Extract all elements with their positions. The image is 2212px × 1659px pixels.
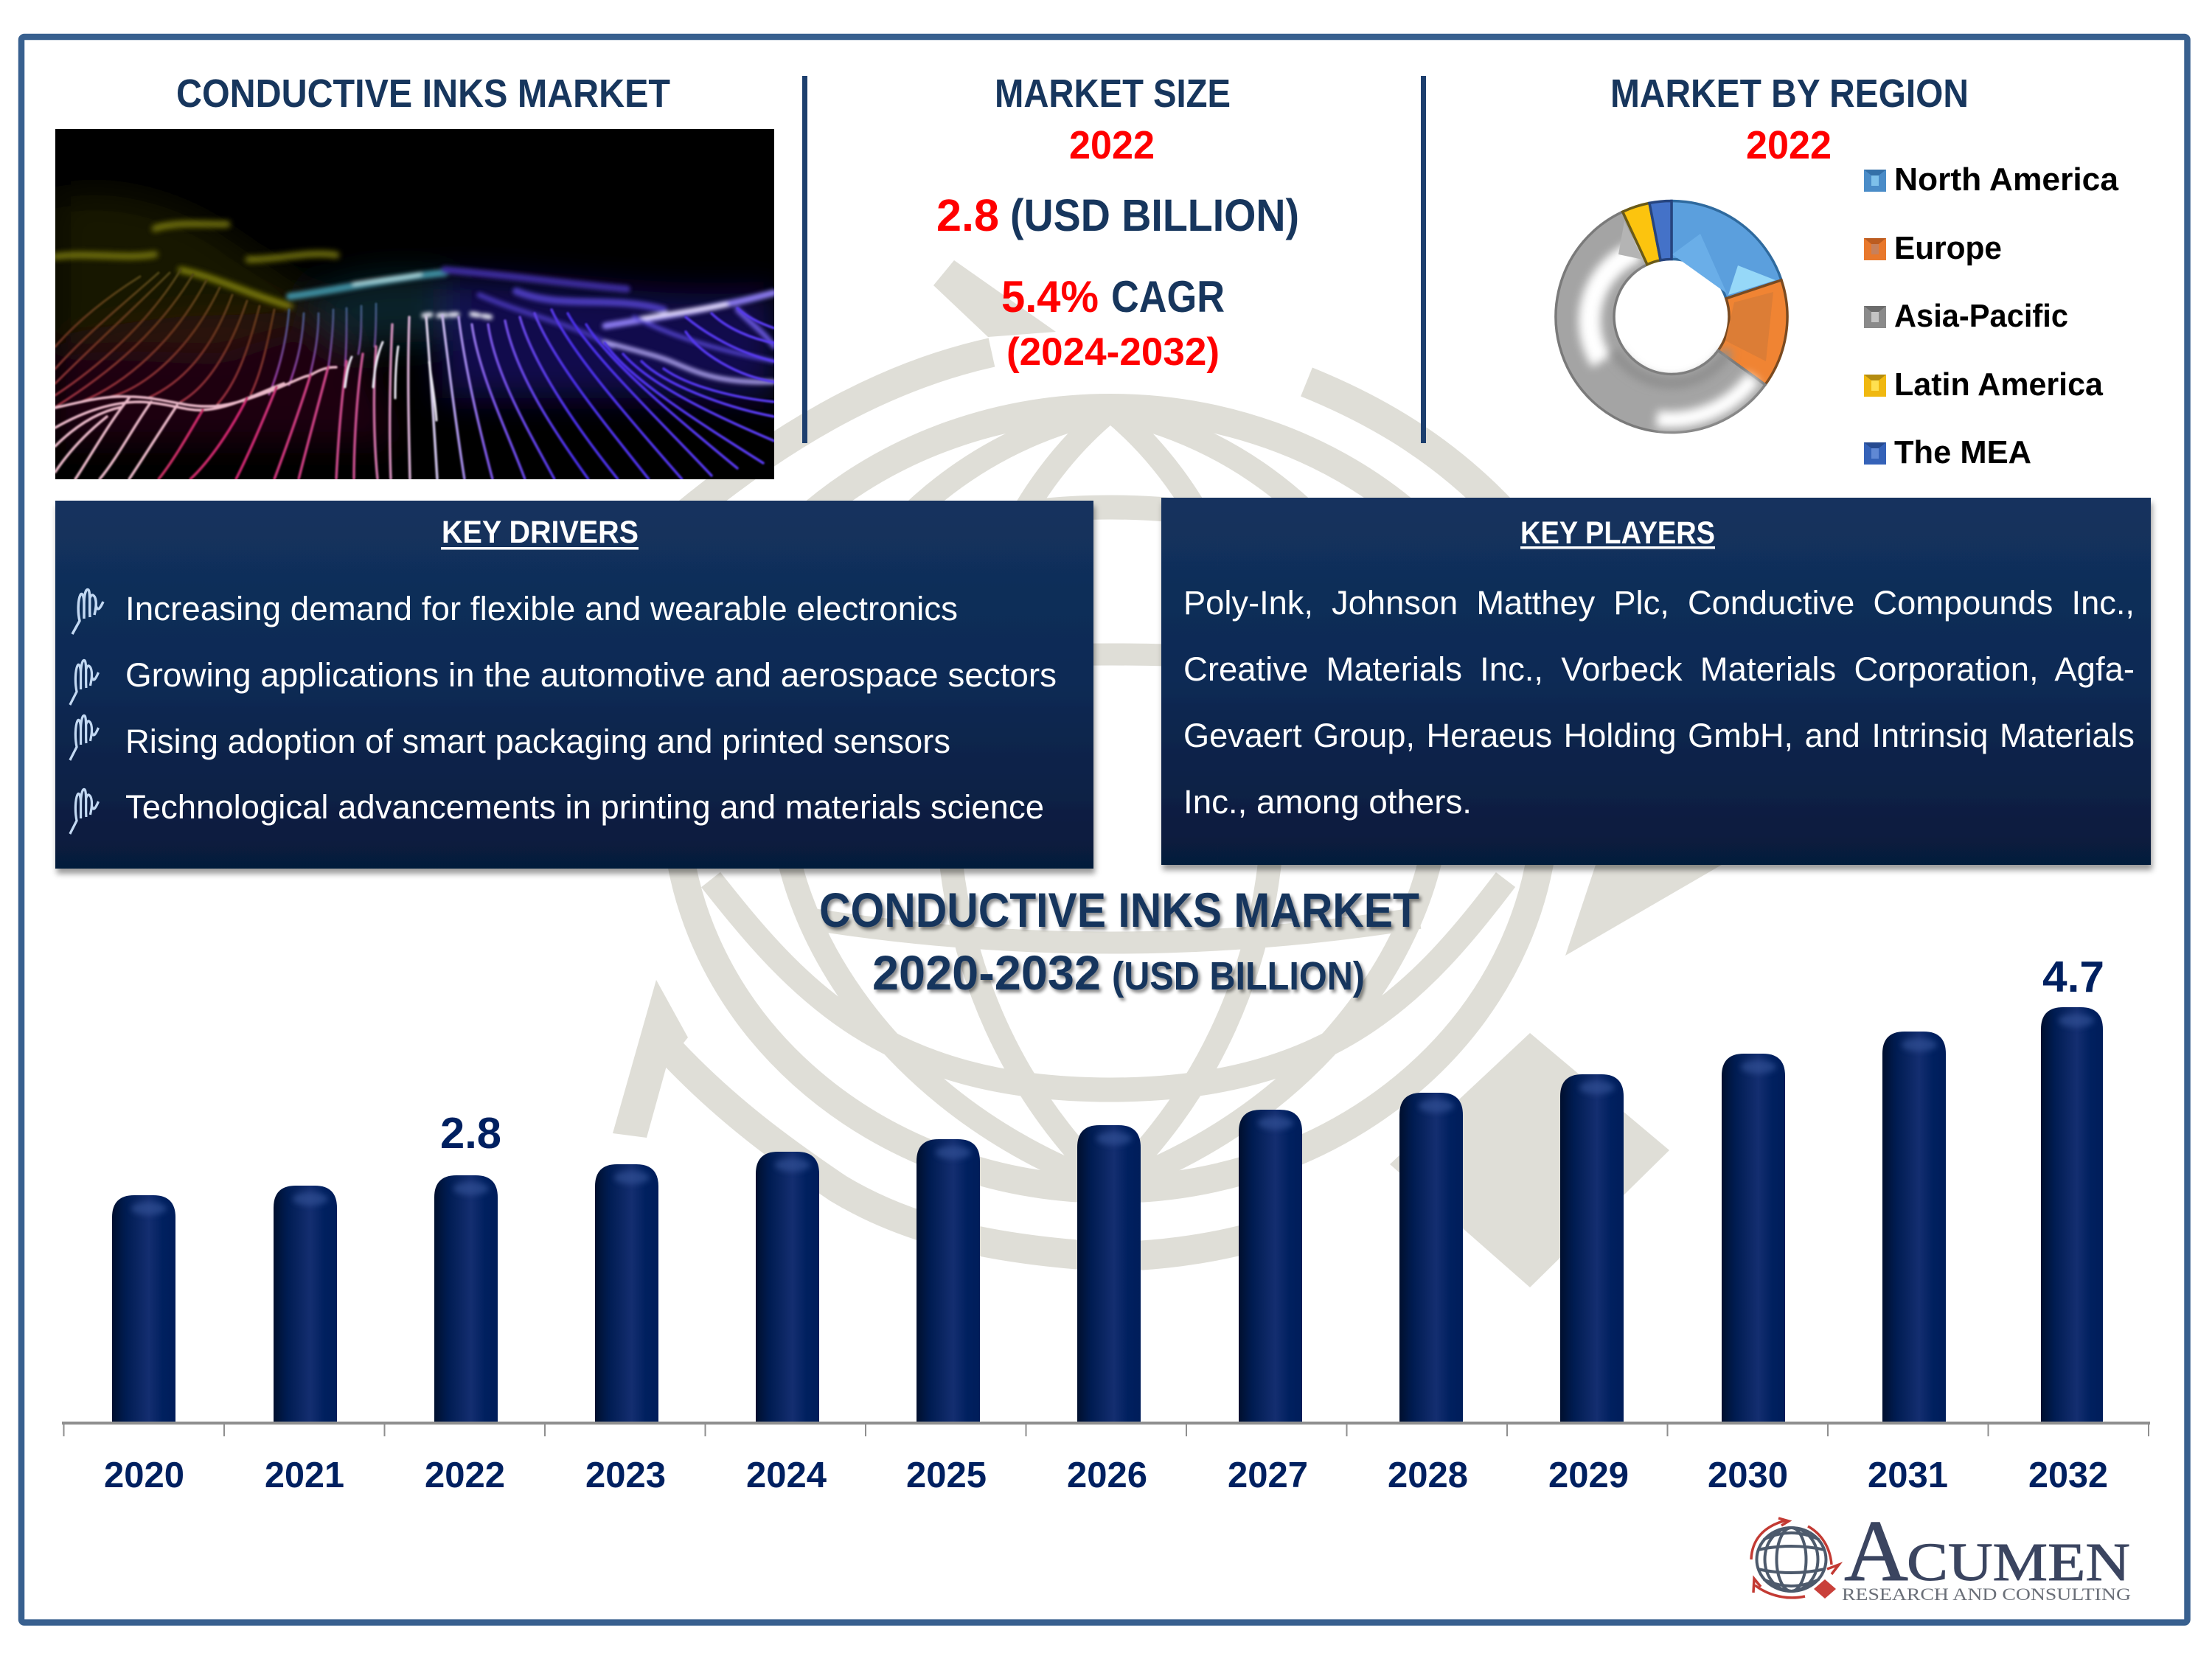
bar 2021: [274, 1186, 337, 1422]
CAGR value: 5.4%: [1001, 272, 1099, 321]
photo: abstract light wave: [55, 129, 774, 479]
key players heading: KEY PLAYERS: [1520, 515, 1715, 551]
year labels: 2026: [1067, 1455, 1147, 1495]
year labels: 2031: [1868, 1455, 1948, 1495]
bar 2028: [1399, 1093, 1463, 1422]
value label 2022: 2.8: [440, 1109, 501, 1158]
driver 1: Increasing demand for flexible and wearable electronics: [125, 590, 958, 627]
year labels: 2020: [104, 1455, 184, 1495]
chart title: CONDUCTIVE INKS MARKET: [819, 883, 1419, 937]
key players text: Inc., among others.: [1183, 783, 1472, 821]
key drivers heading: KEY DRIVERS: [442, 515, 639, 550]
year labels: 2021: [265, 1455, 344, 1495]
divider right: [1421, 76, 1426, 443]
CAGR value: [1001, 272, 1225, 321]
year labels: 2027: [1228, 1455, 1308, 1495]
legend item: North America: North America: [1894, 161, 2119, 198]
market by region heading: MARKET BY REGION: [1610, 72, 1969, 116]
driver 2: Growing applications in the automotive and aerospace sectors: [125, 656, 1057, 694]
legend item: Asia-Pacific: Asia-Pacific: [1894, 298, 2068, 334]
x axis: [62, 1423, 2150, 1436]
icon: red arrows and diamond: [1751, 1518, 1839, 1599]
year labels: [104, 1455, 2108, 1495]
value label 2032: 4.7: [2042, 953, 2104, 1001]
divider left: [802, 76, 807, 443]
year labels: 2029: [1548, 1455, 1629, 1495]
panel: key drivers: [55, 501, 1093, 869]
market by region year: 2022: [1746, 123, 1832, 167]
icon: globe: [1756, 1528, 1826, 1591]
market size value: 2.8: [936, 190, 999, 240]
legend item: Latin America: Latin America: [1894, 366, 2104, 403]
chart title: [819, 883, 1419, 1000]
driver 3: Rising adoption of smart packaging and printed sensors: [125, 723, 950, 760]
panel: key players: [1161, 498, 2151, 865]
logo: Acumen Research and Consulting: [1751, 1502, 2131, 1604]
bar 2023: [595, 1164, 658, 1422]
bar chart: [62, 953, 2150, 1495]
CAGR period: (2024-2032): [1006, 330, 1220, 374]
slice: Europe: [1718, 280, 1787, 385]
slice: North America: [1672, 201, 1781, 299]
key players text: [1183, 584, 2135, 821]
bar 2031: [1882, 1032, 1946, 1422]
slice: Asia-Pacific: [1556, 212, 1765, 433]
bar 2025: [917, 1139, 980, 1422]
market size value: (USD BILLION): [1010, 190, 1299, 240]
bar 2026: [1077, 1125, 1141, 1422]
legend item: Europe: Europe: [1894, 230, 2002, 266]
key players text: Creative Materials Inc., Vorbeck Materials Corporation, Agfa-: [1183, 650, 2135, 688]
year labels: 2024: [746, 1455, 827, 1495]
chart title: (USD BILLION): [1112, 954, 1365, 998]
market size heading: MARKET SIZE: [995, 72, 1231, 116]
wordmark: RESEARCH AND CONSULTING: [1842, 1585, 2131, 1604]
wordmark: CUMEN: [1907, 1532, 2130, 1592]
bar 2020: [112, 1195, 175, 1422]
year labels: 2025: [906, 1455, 987, 1495]
background watermark: globe logo: [613, 260, 1725, 1287]
key players text: Gevaert Group, Heraeus Holding GmbH, and Intrinsiq Materials: [1183, 717, 2135, 754]
year labels: 2030: [1708, 1455, 1788, 1495]
chart title: 2020-2032: [872, 945, 1101, 1000]
key players text: Poly-Ink, Johnson Matthey Plc, Conductive Compounds Inc.,: [1183, 584, 2135, 622]
bar 2027: [1239, 1110, 1302, 1422]
slice: The MEA: [1649, 201, 1672, 260]
bar 2029: [1560, 1074, 1624, 1422]
year labels: 2022: [425, 1455, 505, 1495]
legend: [1864, 161, 2119, 470]
legend item: The MEA: The MEA: [1894, 434, 2031, 470]
market size year: 2022: [1069, 123, 1155, 167]
year labels: 2023: [585, 1455, 666, 1495]
donut chart: [1556, 201, 1787, 433]
wordmark: A: [1844, 1502, 1908, 1599]
year labels: 2032: [2028, 1455, 2108, 1495]
haze: [55, 195, 774, 442]
bar 2024: [756, 1152, 819, 1422]
driver 4: Technological advancements in printing and materials science: [125, 788, 1044, 826]
bar 2030: [1722, 1054, 1785, 1422]
bar 2022: [434, 1175, 498, 1422]
CAGR value: CAGR: [1111, 272, 1225, 321]
title: conductive inks market: CONDUCTIVE INKS MARKET: [176, 72, 670, 116]
wordmark: [1842, 1502, 2131, 1604]
slice: Latin America: [1623, 203, 1660, 265]
year labels: 2028: [1388, 1455, 1468, 1495]
bar 2032: [2041, 1007, 2103, 1422]
